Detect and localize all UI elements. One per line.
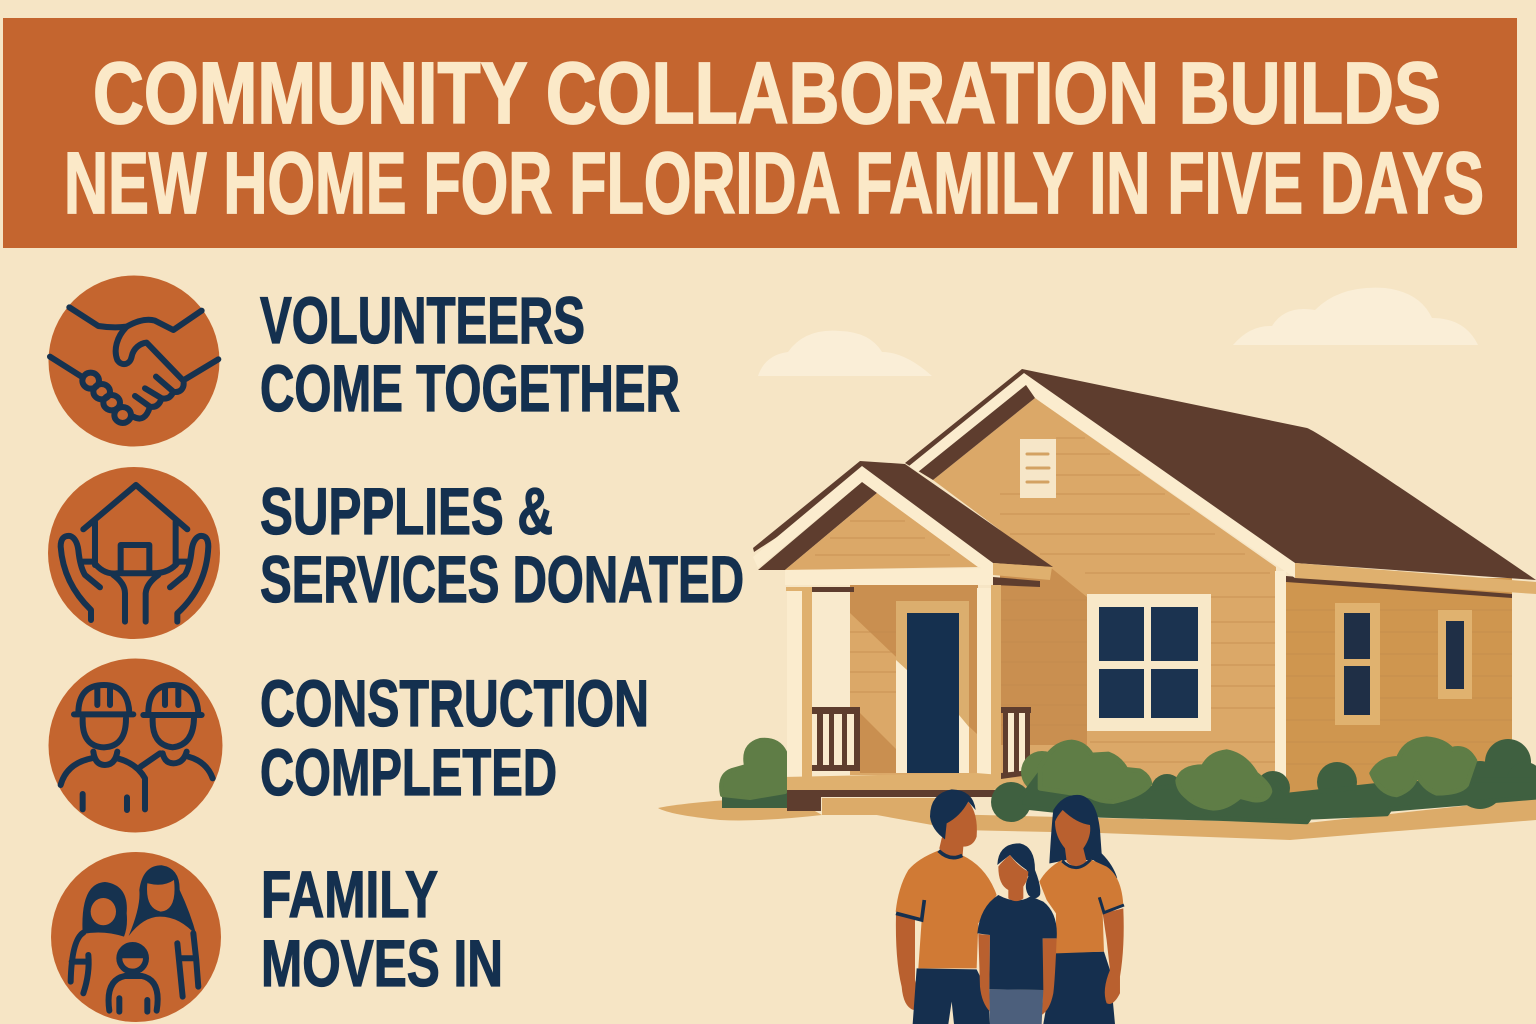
porch roof <box>753 461 1053 587</box>
label <box>260 283 680 425</box>
label: COMPLETED <box>260 735 557 809</box>
main roof <box>905 369 1536 580</box>
porch floor <box>783 773 1023 815</box>
label: COME TOGETHER <box>260 351 680 425</box>
list item: family moves in <box>51 852 503 1022</box>
label <box>260 666 649 809</box>
icon: construction workers <box>48 658 222 832</box>
house <box>721 369 1536 822</box>
porch back wall <box>850 585 978 775</box>
front door <box>896 601 969 773</box>
mother <box>1039 795 1124 1024</box>
cloud: left <box>758 331 932 376</box>
left shrub <box>721 740 787 808</box>
title banner <box>3 18 1517 248</box>
icon: hands holding house <box>48 467 220 639</box>
side window 2 <box>1438 610 1472 699</box>
gable vent <box>1020 439 1056 498</box>
main window <box>1087 594 1211 731</box>
side window 1 <box>1335 603 1380 725</box>
icon: handshake <box>48 276 220 446</box>
porch railings <box>812 707 1031 779</box>
label: SERVICES DONATED <box>260 542 744 616</box>
child <box>977 843 1057 1024</box>
ground path <box>658 797 1536 840</box>
label <box>260 474 744 616</box>
front wall and gable <box>933 398 1276 790</box>
label: MOVES IN <box>261 926 503 1000</box>
label: CONSTRUCTION <box>260 666 649 740</box>
porch columns and panel <box>786 585 1001 785</box>
list item: volunteers come together <box>48 276 680 446</box>
label: SUPPLIES & <box>260 474 553 548</box>
side wall <box>1286 578 1512 794</box>
main roof fascia <box>909 373 1536 786</box>
list item: construction completed <box>48 658 649 832</box>
label: FAMILY <box>261 857 438 931</box>
label: VOLUNTEERS <box>260 283 585 357</box>
father <box>896 789 997 1024</box>
label <box>261 857 503 1000</box>
family illustration <box>896 789 1124 1024</box>
railing infill <box>817 713 1030 773</box>
list item: supplies and services donated <box>48 467 744 639</box>
icon: family <box>51 852 221 1022</box>
foundation shrubs <box>991 739 1536 822</box>
cloud: right <box>1233 288 1478 345</box>
